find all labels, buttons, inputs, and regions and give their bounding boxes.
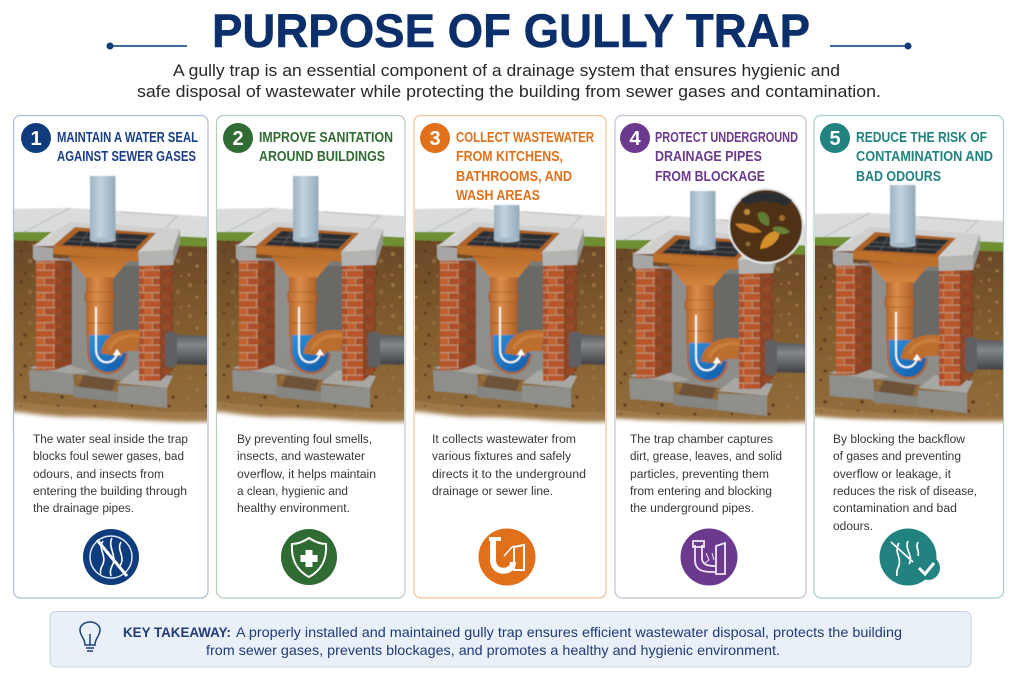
body text 5 bbox=[833, 432, 977, 533]
heading 5 bbox=[856, 130, 993, 185]
number badge 4 bbox=[620, 123, 650, 153]
inset: trapped debris bbox=[729, 189, 803, 263]
body text 2: insects, and wastewater bbox=[237, 449, 365, 463]
body text 5: odours. bbox=[833, 519, 873, 533]
body text 4 bbox=[630, 432, 782, 515]
body text 3 bbox=[432, 432, 586, 498]
number badge 1 bbox=[21, 123, 51, 153]
icon: light bulb bbox=[80, 622, 100, 651]
illustration: gully trap 5 bbox=[815, 184, 1003, 430]
body text 1: The water seal inside the trap bbox=[33, 432, 188, 446]
heading 5: CONTAMINATION AND bbox=[856, 149, 993, 165]
takeaway text: A properly installed and maintained gully trap ensures efficient wastewater disposal, protects the building bbox=[236, 624, 902, 640]
body text 3: various fixtures and safely bbox=[432, 449, 572, 463]
body text 5: reduces the risk of disease, bbox=[833, 484, 977, 498]
number badge 2 bbox=[223, 123, 253, 153]
number badge 5: 5 bbox=[829, 128, 841, 150]
panel: improve sanitation bbox=[203, 116, 423, 598]
body text 2: a clean, hygienic and bbox=[237, 484, 348, 498]
body text 2 bbox=[237, 432, 376, 515]
icon: shield bbox=[281, 529, 337, 585]
body text 1 bbox=[33, 432, 188, 515]
takeaway text bbox=[123, 624, 902, 658]
title: PURPOSE OF GULLY TRAP bbox=[212, 4, 810, 57]
intro text: safe disposal of wastewater while protecting the building from sewer gases and contamination. bbox=[137, 83, 881, 101]
illustration: gully trap 2 bbox=[217, 176, 404, 430]
icon: clogged pipe bbox=[680, 528, 738, 586]
icon: odour check bbox=[880, 528, 940, 586]
heading 5: REDUCE THE RISK OF bbox=[856, 130, 987, 146]
number badge 3 bbox=[420, 123, 450, 153]
heading 4: PROTECT UNDERGROUND bbox=[655, 130, 798, 146]
heading 4: DRAINAGE PIPES bbox=[655, 149, 762, 165]
heading 3: FROM KITCHENS, bbox=[456, 149, 563, 165]
body text 4: the underground pipes. bbox=[630, 501, 754, 515]
title rule right bbox=[830, 42, 912, 50]
body text 5: of gases and preventing bbox=[833, 449, 961, 463]
illustration: gully trap 4 bbox=[616, 190, 805, 426]
title rule left bbox=[106, 42, 187, 50]
heading 4 bbox=[655, 130, 798, 185]
body text 3: directs it to the underground bbox=[432, 467, 586, 481]
heading 3: WASH AREAS bbox=[456, 188, 540, 204]
body text 4: dirt, grease, leaves, and solid bbox=[630, 449, 782, 463]
intro text: A gully trap is an essential component of a drainage system that ensures hygienic and bbox=[173, 62, 840, 80]
number badge 1: 1 bbox=[30, 128, 42, 150]
illustration: gully trap 1 bbox=[14, 176, 207, 430]
body text 4: The trap chamber captures bbox=[630, 432, 773, 446]
heading 2 bbox=[259, 130, 393, 165]
number badge 5 bbox=[820, 123, 850, 153]
intro text bbox=[137, 62, 881, 101]
body text 2: healthy environment. bbox=[237, 501, 350, 515]
body text 1: blocks foul sewer gases, bad bbox=[33, 449, 184, 463]
body text 1: the drainage pipes. bbox=[33, 501, 134, 515]
illustration: gully trap 3 bbox=[415, 204, 605, 425]
panel: reduce contamination bbox=[800, 116, 1020, 598]
body text 2: By preventing foul smells, bbox=[237, 432, 372, 446]
heading 2: IMPROVE SANITATION bbox=[259, 130, 393, 146]
heading 4: FROM BLOCKAGE bbox=[655, 169, 765, 185]
panel: maintain a water seal bbox=[0, 116, 220, 598]
icon: no gases bbox=[83, 529, 139, 585]
panel: protect underground pipes bbox=[600, 116, 820, 598]
number badge 4: 4 bbox=[629, 128, 641, 150]
icon: trap pipe bbox=[478, 528, 536, 586]
body text 5: By blocking the backflow bbox=[833, 432, 965, 446]
body text 1: entering the building through bbox=[33, 484, 187, 498]
body text 3: It collects wastewater from bbox=[432, 432, 576, 446]
heading 3 bbox=[456, 130, 594, 204]
heading 1: AGAINST SEWER GASES bbox=[57, 149, 196, 165]
body text 1: odours, and insects from bbox=[33, 467, 164, 481]
body text 5: contamination and bad bbox=[833, 501, 957, 515]
heading 3: COLLECT WASTEWATER bbox=[456, 130, 594, 146]
takeaway text: from sewer gases, prevents blockages, and promotes a healthy and hygienic environment. bbox=[206, 642, 780, 658]
takeaway text: KEY TAKEAWAY: bbox=[123, 624, 231, 640]
body text 4: from entering and blocking bbox=[630, 484, 772, 498]
body text 2: overflow, it helps maintain bbox=[237, 467, 376, 481]
body text 4: particles, preventing them bbox=[630, 467, 769, 481]
key takeaway box bbox=[50, 612, 971, 667]
body text 3: drainage or sewer line. bbox=[432, 484, 553, 498]
heading 5: BAD ODOURS bbox=[856, 169, 941, 185]
heading 1: MAINTAIN A WATER SEAL bbox=[57, 130, 198, 146]
number badge 3: 3 bbox=[429, 128, 441, 150]
heading 2: AROUND BUILDINGS bbox=[259, 149, 385, 165]
heading 3: BATHROOMS, AND bbox=[456, 169, 572, 185]
number badge 2: 2 bbox=[232, 128, 244, 150]
heading 1 bbox=[57, 130, 198, 165]
body text 5: overflow or leakage, it bbox=[833, 467, 952, 481]
panel: collect wastewater bbox=[404, 116, 624, 598]
